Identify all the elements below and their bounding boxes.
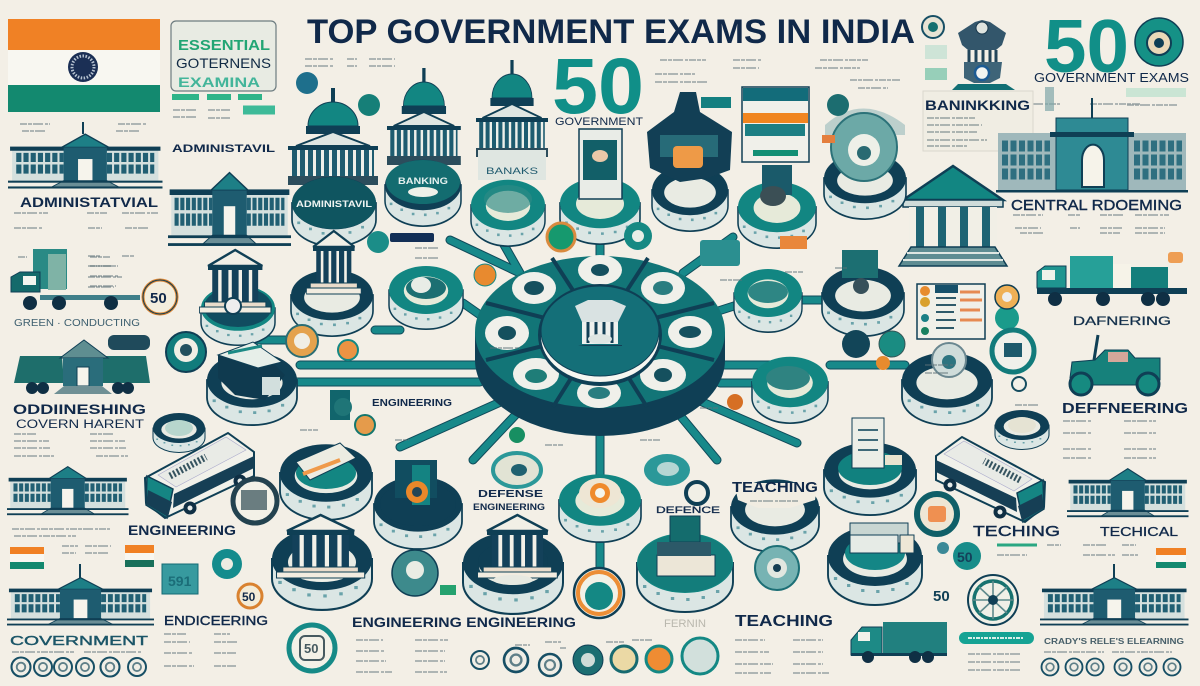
disc: small stacked right: [995, 410, 1049, 450]
right 50 government exams: GOVERNMENT EXAMS: [1034, 70, 1189, 85]
right truck: [1037, 252, 1187, 306]
heading: oddiineshing government: ODDIINESHING: [13, 402, 146, 417]
caption: conducting: GREEN · CONDUCTING: [14, 318, 140, 329]
building: bottom right lower: [1040, 564, 1188, 625]
disc: exam papers: [824, 418, 916, 515]
orange tag: [780, 236, 807, 249]
small green notes: [925, 45, 1186, 111]
right 50 government exams: 50: [1044, 4, 1129, 88]
lower right cluster: [824, 418, 1178, 670]
disc and capitol: banks: BANAKS: [486, 166, 538, 176]
icon row bottom right: [1042, 658, 1180, 676]
disc: files: [828, 523, 922, 605]
badge: dark ring left: [233, 479, 277, 523]
disc and capitol: administrative: [288, 88, 378, 246]
heading: administrative second: ADMINISTAVIL: [172, 143, 275, 155]
wheel emblem: [968, 575, 1018, 625]
caption: defence: DEFENCE: [656, 505, 720, 515]
banking panel: [923, 91, 1033, 151]
central hub with emblem: [475, 255, 725, 436]
heading: administrative: ADMINISTATVIAL: [20, 194, 159, 210]
central 50 government: GOVERNMENT: [555, 116, 643, 128]
mid left discs: [153, 231, 463, 452]
disc: teal node right: [734, 269, 802, 332]
mid right discs: [734, 250, 1188, 458]
caption: defence engineering: [473, 489, 545, 512]
caption: bottom right: [1044, 637, 1184, 652]
icon row bottom left: [12, 658, 146, 676]
Indian flag top left: [8, 19, 160, 112]
heading: engineering small: ENGINEERING: [372, 398, 452, 409]
orange badge right: [995, 285, 1019, 309]
title: TOP GOVERNMENT EXAMS IN INDIA: [307, 13, 915, 51]
left truck: [11, 249, 140, 310]
small round badges: [286, 72, 1026, 443]
connector spokes radiating from the hub: [235, 215, 905, 570]
caption: bottom right: CRADY'S RELE'S ELEARNING: [1044, 637, 1184, 646]
centre bottom icon row: [471, 638, 718, 676]
green notes beside left truck: [88, 256, 134, 287]
badge 50 teal: [937, 542, 981, 570]
small teal lens: [755, 546, 799, 590]
disc: small temple: [200, 250, 275, 345]
disc and capitol: banking: [385, 68, 461, 226]
bottom right buildings and row: [1040, 469, 1188, 676]
heading: technical: TECHICAL: [1100, 524, 1178, 539]
heading: teaching: [735, 613, 833, 673]
small dark badge: [686, 482, 708, 504]
right 50 government exams: [1034, 4, 1189, 88]
scattered small captions: [300, 248, 1039, 445]
central 50 government: 50: [552, 41, 644, 130]
teal pale lens: [644, 454, 690, 486]
disc: temple two: [291, 231, 373, 336]
essential exams badge: ESSENTIAL: [178, 37, 270, 54]
hub segment insets: [485, 255, 712, 408]
bus right: [936, 437, 1045, 522]
truck bottom right: [851, 622, 947, 663]
badge 50 left: 50: [150, 290, 167, 307]
centre bottom column: [471, 453, 833, 676]
heading: endiceering: ENDICEERING: [164, 613, 268, 628]
essential exams badge: EXAMINA: [178, 74, 260, 90]
jeep: [1070, 335, 1160, 395]
building: bottom left lower: [7, 564, 154, 625]
capitol buildings and top discs: [288, 60, 906, 248]
disc and tablet: [738, 87, 816, 248]
hub emblem: [575, 300, 626, 346]
badge 50 teal: 50: [957, 549, 973, 565]
disc and document: [560, 129, 640, 244]
teal box: 591: [168, 573, 192, 589]
heading: oddiineshing government: COVERN HARENT: [16, 419, 144, 431]
disc: bank temple: [272, 515, 372, 610]
disc and machine: [647, 92, 732, 231]
scattered badges: [143, 72, 1039, 445]
heading: central: CENTRAL RDOEMING: [1011, 197, 1182, 214]
heading: covernment: COVERNMENT: [10, 633, 148, 648]
heading: defence engineering: DEFFNEERING: [1062, 400, 1188, 417]
engineering column captions: [356, 640, 448, 672]
badge 50 navy: 50: [933, 588, 950, 605]
disc: papers and charts: [280, 443, 372, 520]
teal box: [162, 564, 198, 594]
building: administrative left: [8, 122, 162, 189]
temple: central exams: [899, 166, 1007, 266]
heading: teching: [973, 523, 1138, 555]
teal pill: [959, 632, 1034, 670]
caption under building: [12, 529, 111, 553]
document panel: [917, 284, 985, 339]
disc and globe: [822, 94, 906, 219]
disc: teal landscape: [752, 357, 828, 423]
top captions: [14, 59, 1177, 286]
heading: covernment: [10, 633, 148, 652]
ring 50 badge: [289, 625, 335, 671]
small teal disc: [392, 550, 456, 596]
disc: with papers: [822, 250, 904, 336]
disc: bank temple two: [463, 515, 563, 614]
heading: oddiineshing government: [13, 402, 146, 456]
badge 50 orange: [238, 584, 262, 608]
disc: orange device: [374, 460, 462, 549]
caption: defence engineering: DEFENSE: [478, 489, 543, 500]
teal tape badge: [212, 549, 242, 579]
small flag second: [125, 545, 154, 567]
ring with orange centre: [917, 494, 957, 534]
disc: lens node: [902, 343, 992, 425]
badge 50 orange: 50: [242, 590, 256, 604]
centre bottom text pieces: [515, 640, 652, 648]
heading: dafnering: DAFNERING: [1073, 314, 1171, 328]
target disc bottom: [574, 568, 624, 618]
bus left: [145, 433, 254, 518]
small flag left: [10, 547, 44, 569]
disc and capitol: administrative: ADMINISTAVIL: [296, 199, 372, 210]
top right emblem: [952, 20, 1015, 90]
ring badge right: [992, 330, 1034, 372]
disc and capitol: banks: [471, 60, 548, 246]
essential exams badge: [171, 21, 276, 118]
heading: teaching: TEACHING: [735, 613, 833, 630]
building: administrative centre: [168, 173, 291, 246]
disc: teaching: TEACHING: [732, 479, 818, 496]
lower discs left and centre: [128, 390, 576, 672]
navy tag: [390, 233, 434, 242]
heading: defence engineering: [1062, 400, 1188, 458]
ring 50 badge: 50: [304, 641, 318, 656]
teal pale lens left: [493, 453, 541, 487]
heading: teching: TECHING: [973, 523, 1060, 540]
teal tag: [700, 240, 740, 266]
badge 50 left: [143, 280, 177, 314]
heading: engineering engineering: ENGINEERING ENGINEERING: [352, 614, 576, 630]
building: bottom left upper: [7, 467, 128, 515]
banking panel: BANINKKING: [925, 97, 1030, 113]
oil device: [330, 390, 375, 435]
heading: endiceering: [164, 613, 268, 666]
disc: target: [559, 474, 641, 542]
heading: engineering bus caption: ENGINEERING: [128, 522, 236, 538]
caption: defence engineering: ENGINEERING: [473, 502, 545, 512]
disc: teal node: [389, 266, 463, 329]
building: bottom right upper: [1067, 469, 1188, 517]
small flag right: [1156, 548, 1186, 568]
bottom left buildings and row: [7, 467, 154, 676]
disc: round badge: [166, 332, 206, 372]
disc and capitol: banking: BANKING: [398, 176, 448, 186]
essential exams badge: GOTERNENS: [176, 55, 271, 71]
faded label: FERNIN: [664, 618, 706, 630]
disc: book: [207, 342, 297, 425]
building truck: [14, 335, 150, 394]
disc: small stacked: [153, 413, 205, 452]
building: central gate right: [996, 98, 1188, 192]
small top medallion: [922, 16, 944, 38]
disc: teaching: [731, 479, 819, 552]
disc: teal document stack: [637, 516, 733, 612]
